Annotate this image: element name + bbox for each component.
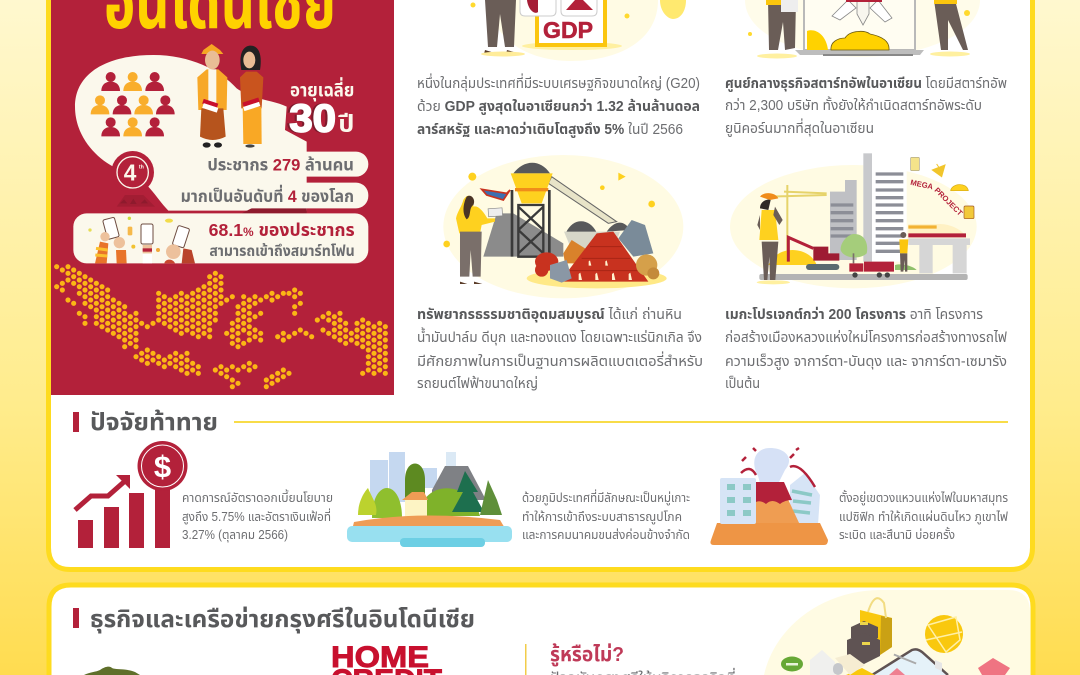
text: infrastructure: ทำให้การเข้าถึงระบบสาธารณูปโภค xyxy=(522,510,682,524)
text: G20 economy: หนึ่งในกลุ่มประเทศที่มีระบบเศรษฐกิจขนาดใหญ่ (G20) xyxy=(417,73,700,92)
age stat: 30 xyxy=(287,98,334,141)
logo: partner green leaf xyxy=(84,667,140,675)
stat pill: rank: มากเป็นอันดับที่ 4 ของโลก xyxy=(181,184,354,206)
speech bubble xyxy=(75,55,307,211)
text: etc: เป็นต้น xyxy=(725,375,760,392)
text: electric vehicles: รถยนต์ไฟฟ้าขนาดใหญ่ xyxy=(417,375,538,392)
text: GDP growth: ลาร์สหรัฐ และคาดว่าเติบโตสูงถึง 5% ในปี 2566 xyxy=(417,121,683,139)
illustration: digital commerce xyxy=(764,590,1030,675)
stat pill: population xyxy=(207,152,368,177)
text: battery potential: มีศักยภาพในการเป็นฐานการผลิตแบตเตอรี่สำหรับ xyxy=(417,351,703,370)
illustration: mining resources xyxy=(443,155,683,298)
age stat: อายุเฉลี่ย xyxy=(290,77,354,102)
icon: man in traditional dress xyxy=(197,44,227,148)
profile graphics and stats xyxy=(73,44,368,263)
text: natural resources: ทรัพยากรธรรมชาติอุดมสมบูรณ์ ได้แก่ ถ่านหิน xyxy=(417,306,682,324)
illustration: mega project xyxy=(730,153,977,288)
age stat: 30 xyxy=(289,98,336,141)
icon: island xyxy=(347,452,512,547)
text: logistics: และการคมนาคมขนส่งค่อนข้างจำกัด xyxy=(522,528,690,542)
text: geography: ด้วยภูมิประเทศที่มีลักษณะเป็นหมู่เกาะ xyxy=(522,489,690,505)
text: interest rate: คาดการณ์อัตราดอกเบี้ยนโยบาย xyxy=(182,489,333,505)
text: high speed rail: ความเร็วสูง จาการ์ตา-บันดุง และ จาการ์ตา-เซมารัง xyxy=(725,354,1007,370)
text: ring of fire: ตั้งอยู่เขตวงแหวนแห่งไฟในมหาสมุทร xyxy=(839,490,1008,505)
text: tsunami: ระเบิด และสึนามิ บ่อยครั้ง xyxy=(839,527,955,542)
stat pill: smartphone access: สามารถเข้าถึงสมาร์ทโฟน xyxy=(209,242,355,260)
logo: Home Credit: HOME xyxy=(331,641,429,674)
illustration: startup rocket xyxy=(745,0,980,58)
text: inflation: สูงถึง 5.75% และอัตราเงินเฟ้อที่ xyxy=(182,508,331,524)
illustration: GDP: GDP xyxy=(543,17,593,43)
text: date: 3.27% (ตุลาคม 2566) xyxy=(182,528,288,542)
text: unicorns: ยูนิคอร์นมากที่สุดในอาเซียน xyxy=(725,118,874,137)
illustration: GDP xyxy=(470,0,686,61)
icon: volcano xyxy=(710,448,828,545)
icon: crowd of people xyxy=(91,72,175,136)
icon: interest rate chart: $ xyxy=(154,449,171,484)
text: mega projects: เมกะโปรเจกต์กว่า 200 โครงการ อาทิ โครงการ xyxy=(725,306,983,323)
stat pill: rank xyxy=(180,183,368,208)
heading: Krungsri network: ธุรกิจและเครือข่ายกรุงศรีในอินโดนีเซีย xyxy=(90,605,475,634)
age stat xyxy=(287,77,354,141)
text: startup hub: ศูนย์กลางธุรกิจสตาร์ทอัพในอาเซียน โดยมีสตาร์ทอัพ xyxy=(725,76,1007,93)
icon: woman in traditional dress xyxy=(240,46,263,148)
text: new capital: ก่อสร้างเมืองหลวงแห่งใหม่โครงการก่อสร้างทางรถไฟ xyxy=(725,329,1007,346)
heading: challenges: ปัจจัยท้าทาย xyxy=(90,408,218,436)
text: GDP detail: ด้วย GDP สูงสุดในอาเซียนกว่า 1.32 ล้านล้านดอล xyxy=(417,98,700,116)
icon: 4th rank medal: th xyxy=(139,165,144,171)
panel: main white card xyxy=(48,0,1032,570)
text: earthquakes: แปซิฟิก ทำให้เกิดแผ่นดินไหว ภูเขาไฟ xyxy=(839,510,1008,524)
icon: 4th rank medal xyxy=(111,151,155,207)
panel: Indonesia red profile xyxy=(51,0,394,395)
text: startup count: กว่า 2,300 บริษัท ทั้งยังให้กำเนิดสตาร์ทอัพระดับ xyxy=(725,96,982,114)
label: mega project: MEGA xyxy=(910,178,934,191)
callout: did you know: รู้หรือไม่? xyxy=(550,644,624,666)
callout: did you know xyxy=(550,644,736,675)
stat pill: smartphone access xyxy=(73,213,368,263)
icon: 4th rank medal: 4 xyxy=(124,160,137,186)
panel: lower white card xyxy=(49,585,1033,675)
stat pill: population: ประชากร 279 ล้านคน xyxy=(207,156,354,175)
icon: interest rate chart xyxy=(75,441,188,548)
icon: hands holding phones xyxy=(88,217,195,263)
text: minerals: น้ำมันปาล์ม ดีบุก และทองแดง โดยเฉพาะแร่นิกเกิล จึง xyxy=(417,327,702,346)
illustration: mega project: PROJECT xyxy=(933,186,965,218)
map: Indonesia archipelago in dots xyxy=(57,267,385,387)
age stat: ปี xyxy=(338,111,354,137)
stat pill: smartphone access: 68.1% ของประชากร xyxy=(209,220,355,240)
ribbon shadow xyxy=(242,207,307,213)
